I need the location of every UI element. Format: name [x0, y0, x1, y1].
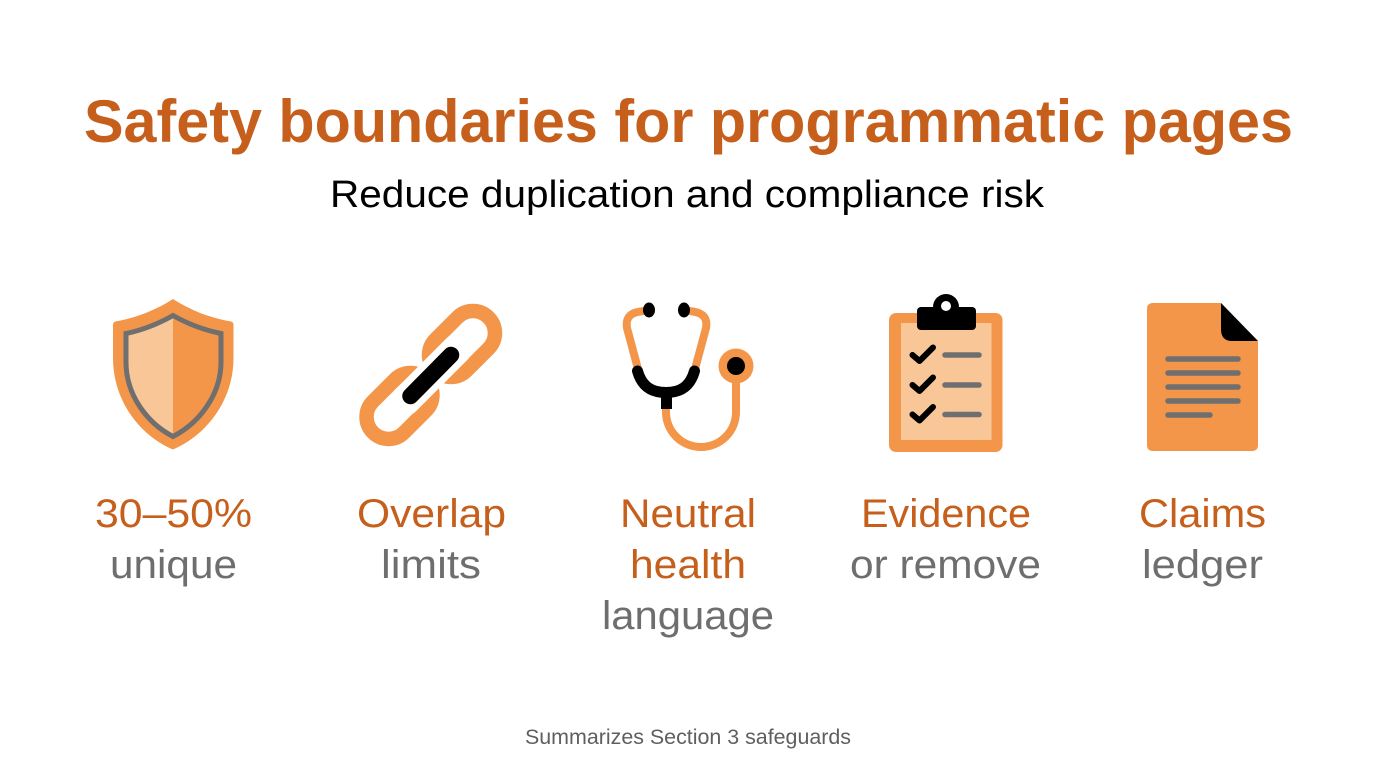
subtitle: Reduce duplication and compliance risk — [330, 174, 1045, 216]
label: Overlap limits — [357, 492, 506, 587]
icon: shield — [113, 299, 234, 450]
label: Neutral health language: health — [630, 543, 746, 587]
label: 30–50% unique — [95, 492, 252, 587]
label: Overlap limits: limits — [381, 543, 481, 587]
label: Neutral health language — [602, 492, 774, 638]
label: Evidence or remove: Evidence — [861, 492, 1031, 536]
label: 30–50% unique: unique — [110, 543, 237, 587]
label: Neutral health language: language — [602, 594, 774, 638]
icon: chain link — [357, 302, 504, 448]
label: Claims ledger — [1139, 492, 1266, 587]
icon: stethoscope — [627, 302, 754, 447]
label: Evidence or remove: or remove — [850, 543, 1041, 587]
label: Overlap limits: Overlap — [357, 492, 506, 536]
footer note: Summarizes Section 3 safeguards — [525, 726, 851, 749]
label: Neutral health language: Neutral — [620, 492, 756, 536]
label: Claims ledger: Claims — [1139, 492, 1266, 536]
icon: document — [1147, 303, 1258, 451]
label: 30–50% unique: 30–50% — [95, 492, 252, 536]
label: Evidence or remove — [850, 492, 1041, 587]
icon: clipboard checklist — [889, 294, 1002, 452]
label: Claims ledger: ledger — [1142, 543, 1263, 587]
title: Safety boundaries for programmatic pages — [84, 88, 1293, 155]
